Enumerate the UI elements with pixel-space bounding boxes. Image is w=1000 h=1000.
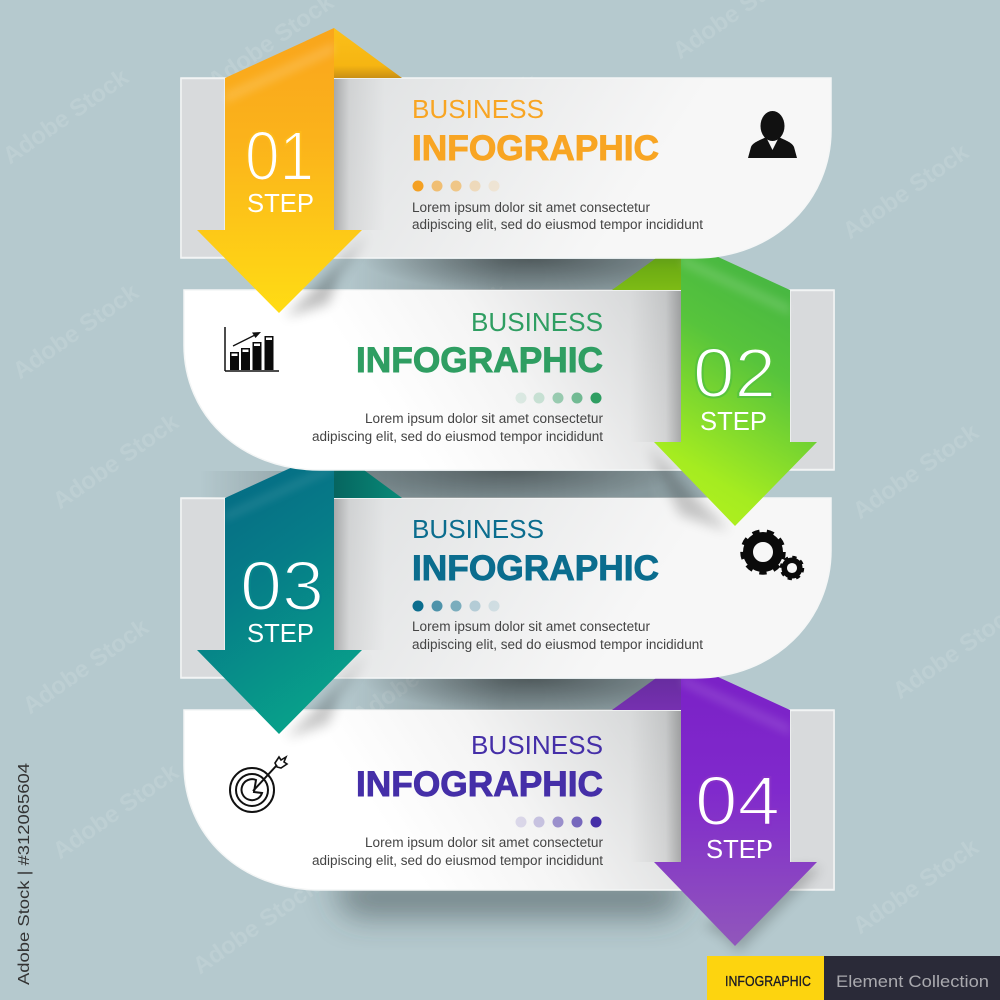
side credit: Adobe Stock | #312065604 [16, 763, 33, 985]
number 01: 01 [245, 117, 314, 195]
step label 1: STEP [247, 188, 314, 218]
number 04: 04 [695, 762, 780, 840]
footer label: element collection [824, 956, 1000, 1000]
text block 2 [312, 411, 603, 444]
arrow 1 fold [334, 28, 402, 78]
number 02: 02 [693, 334, 776, 412]
watermark pattern: Adobe Stock [18, 613, 154, 720]
arrow 4 [612, 660, 821, 952]
step label 2: STEP [700, 406, 767, 436]
text block 2: adipiscing elit, sed do eiusmod tempor incididunt [312, 429, 603, 444]
icon: gears [743, 532, 802, 578]
text block 4: adipiscing elit, sed do eiusmod tempor incididunt [312, 853, 603, 868]
number 03: 03 [240, 547, 324, 625]
shadow band between cards 2 and 3 [200, 471, 760, 498]
watermark pattern: Adobe Stock [8, 278, 144, 385]
arrow 3 [197, 448, 402, 738]
icon: bar chart [225, 327, 279, 371]
heading: business 2: BUSINESS [471, 307, 603, 337]
arrow 3 body [197, 448, 362, 734]
footer label: infographic [707, 956, 824, 1000]
text block 1: adipiscing elit, sed do eiusmod tempor incididunt [412, 217, 703, 232]
heading: business 1: BUSINESS [412, 94, 544, 124]
heading: infographic 1: INFOGRAPHIC [412, 129, 659, 168]
text block 1: Lorem ipsum dolor sit amet consectetur [412, 200, 650, 215]
dots 4 [516, 816, 602, 828]
dots 1 [412, 180, 500, 192]
watermark pattern: Adobe Stock [848, 418, 984, 525]
watermark pattern: Adobe Stock [348, 623, 484, 730]
text block 2: Lorem ipsum dolor sit amet consectetur [365, 411, 603, 426]
arrow 1 body [197, 28, 362, 313]
icon: target [230, 757, 287, 812]
icon: person [748, 111, 797, 158]
footer label: infographic: INFOGRAPHIC [725, 973, 811, 990]
watermark pattern: Adobe Stock [408, 68, 544, 175]
dots 2 [516, 392, 602, 404]
card 1 [181, 78, 831, 258]
step label 3: STEP [247, 618, 314, 648]
watermark pattern: Adobe Stock [838, 138, 974, 245]
card 2 [184, 290, 834, 470]
watermark pattern: Adobe Stock [188, 873, 324, 980]
step label 4: STEP [706, 834, 773, 864]
arrow 2 [612, 240, 817, 531]
text block 4: Lorem ipsum dolor sit amet consectetur [365, 835, 603, 850]
watermark pattern: Adobe Stock [528, 698, 664, 805]
heading: business 3: BUSINESS [412, 514, 544, 544]
text block 3 [412, 619, 703, 652]
text block 4 [312, 835, 603, 868]
watermark pattern: Adobe Stock [48, 408, 184, 515]
dots 3 [412, 600, 500, 612]
watermark pattern: Adobe Stock [48, 758, 184, 865]
arrow 4 body [654, 660, 817, 946]
watermark pattern: Adobe Stock [378, 278, 514, 385]
card 3 [181, 498, 831, 678]
arrow 2 body [654, 240, 817, 526]
watermark pattern: Adobe Stock [848, 833, 984, 940]
shadow band between cards 1 and 2 [340, 259, 700, 290]
shadow under step 4 card [330, 880, 690, 915]
arrow 4 fold [612, 660, 681, 710]
card 4 [184, 710, 834, 890]
footer label: element collection: Element Collection [836, 972, 989, 991]
text block 1 [412, 200, 703, 232]
arrow 3 fold [334, 448, 402, 498]
shadow band between cards 3 and 4 [340, 679, 700, 710]
text block 3: adipiscing elit, sed do eiusmod tempor incididunt [412, 637, 703, 652]
watermark pattern: Adobe Stock [0, 63, 134, 170]
heading: infographic 3: INFOGRAPHIC [412, 549, 659, 588]
arrow 2 fold [612, 240, 681, 290]
heading: business 4: BUSINESS [471, 730, 603, 760]
heading: infographic 2: INFOGRAPHIC [356, 341, 603, 380]
text block 3: Lorem ipsum dolor sit amet consectetur [412, 619, 650, 634]
heading: infographic 4: INFOGRAPHIC [356, 765, 603, 804]
arrow 1 [197, 28, 402, 317]
